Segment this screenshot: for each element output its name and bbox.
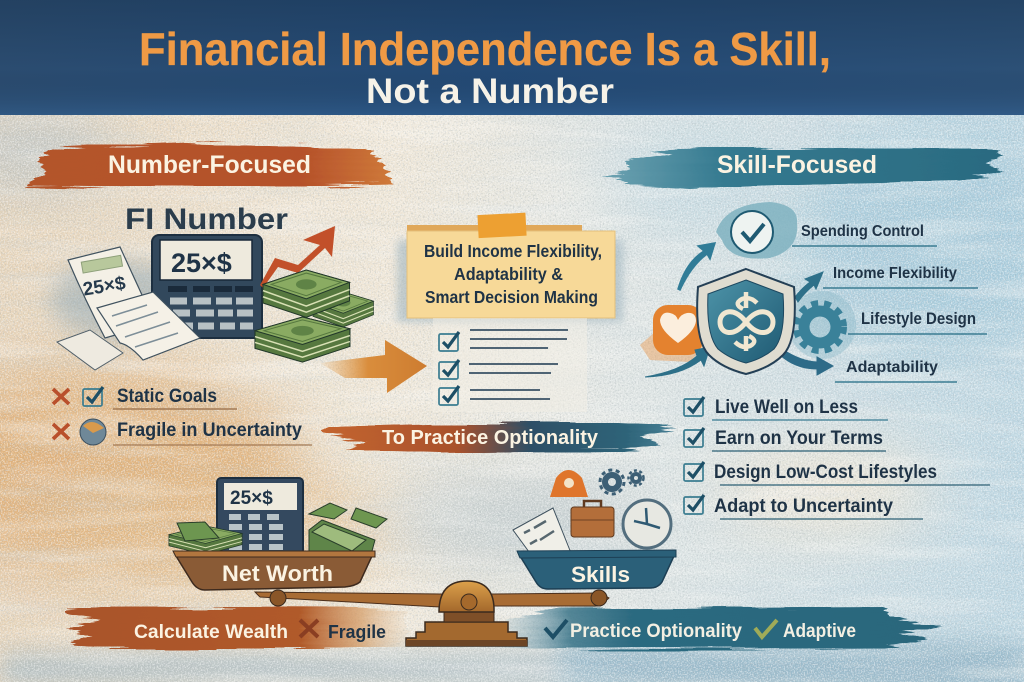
arrow from heart	[645, 347, 710, 377]
list: number-focused drawbacks	[53, 386, 312, 445]
title line two: Not a Number	[366, 72, 614, 111]
Income Flexibility label: Income Flexibility	[833, 265, 957, 282]
map pin icon	[550, 470, 588, 497]
title line one: Financial Independence Is a Skill,	[139, 23, 831, 75]
fulcrum base	[406, 622, 527, 646]
Design Low-Cost Lifestyles: Design Low-Cost Lifestyles	[714, 462, 937, 483]
receipt with 25x$	[68, 247, 150, 338]
document	[97, 292, 200, 360]
arrow to adaptability	[779, 349, 833, 375]
left bottom banner: Calculate Wealth	[134, 622, 288, 643]
banner: To Practice Optionality: To Practice Optionality	[382, 427, 599, 449]
briefcase	[571, 507, 614, 537]
pan contents: 25×$	[230, 488, 273, 509]
banner: To Practice Optionality	[324, 423, 680, 453]
Static Goals row	[53, 386, 237, 409]
pivot	[270, 581, 607, 622]
Adapt to Uncertainty	[684, 495, 923, 519]
Fragile in Uncertainty row: Fragile in Uncertainty	[117, 420, 302, 441]
sticky note: Smart Decision Making	[425, 287, 598, 307]
clock	[623, 500, 671, 548]
Adaptability label: Adaptability	[846, 359, 938, 376]
beam	[255, 592, 609, 607]
heading: Number-Focused brush banner	[26, 143, 393, 187]
dollar infinity symbol	[720, 292, 773, 351]
Lifestyle Design label	[848, 309, 987, 334]
spending control icon	[716, 202, 797, 259]
heart badge	[640, 305, 705, 362]
tape	[477, 213, 527, 238]
right scale pan: Skills: Skills	[571, 562, 630, 587]
heading: Number-Focused brush banner: Number-Focused	[108, 151, 311, 179]
header band	[0, 0, 1024, 115]
FI Number heading: FI Number	[125, 203, 288, 236]
right bottom banner: Practice Optionality	[570, 621, 742, 642]
growth arrow	[260, 226, 335, 288]
calculator	[152, 235, 262, 338]
right scale pan: Skills	[513, 470, 676, 589]
heading: Skill-Focused brush banner: Skill-Focused	[717, 151, 877, 179]
Static Goals row: Static Goals	[117, 386, 217, 407]
shield	[697, 269, 795, 374]
balance scale	[66, 581, 940, 650]
skill diagram	[640, 202, 987, 382]
Live Well on Less: Live Well on Less	[715, 397, 858, 418]
heading: Skill-Focused brush banner	[603, 147, 1003, 188]
gear icon	[788, 291, 856, 359]
document	[513, 508, 571, 556]
right bottom banner: Adaptive	[783, 621, 856, 642]
FI Number illustration	[50, 203, 373, 370]
Adaptability label	[835, 359, 957, 382]
sticky note: Adaptability &	[454, 264, 563, 284]
pan body	[520, 556, 674, 589]
left scale pan: Net Worth: Net Worth	[222, 561, 333, 586]
center arrow	[320, 340, 427, 393]
receipt with 25x$: 25×$	[81, 273, 127, 301]
Fragile in Uncertainty row	[53, 419, 312, 445]
arrow to income flexibility	[795, 272, 823, 302]
Spending Control label: Spending Control	[801, 223, 924, 240]
pan body	[176, 556, 372, 590]
Lifestyle Design label: Lifestyle Design	[861, 309, 976, 328]
back paper	[57, 330, 123, 370]
gears	[605, 475, 619, 489]
list: skill-focused practices	[684, 397, 990, 519]
sticky note	[397, 213, 623, 322]
arrow to spending control	[678, 243, 715, 290]
cash stacks	[313, 292, 373, 327]
pan contents	[169, 478, 387, 555]
sticky note: Build Income Flexibility,	[424, 241, 602, 261]
right bottom banner	[500, 607, 940, 650]
skill items	[513, 470, 671, 556]
left bottom banner	[66, 607, 410, 648]
Earn on Your Terms: Earn on Your Terms	[715, 428, 883, 449]
center checklist	[433, 318, 587, 412]
Adapt to Uncertainty: Adapt to Uncertainty	[714, 496, 893, 517]
left bottom banner: Fragile	[328, 622, 386, 642]
left scale pan: Net Worth	[169, 478, 387, 590]
calculator: 25×$	[171, 248, 232, 278]
